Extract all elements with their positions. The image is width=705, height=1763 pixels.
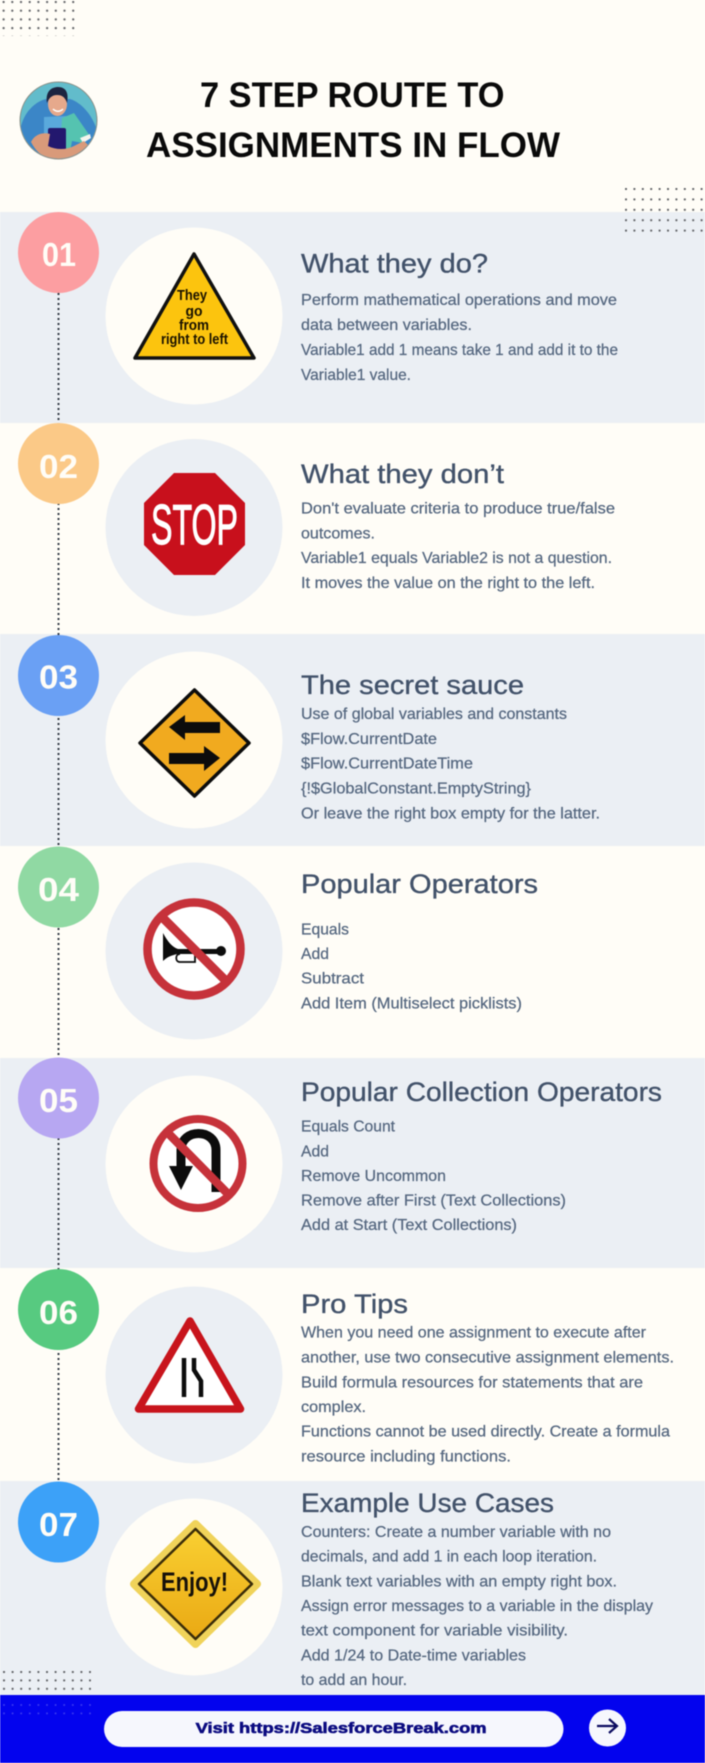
text block: what they do: data between variables. [301,317,472,334]
text block: example use cases: Blank text variables with an empty right box. [301,1574,617,1590]
badge 03: 03 [39,658,78,696]
text block: popular operators: Subtract [301,970,365,988]
text block: the secret sauce: {!$GlobalConstant.EmptyString} [301,780,532,798]
panel: step 5 popular collection operators [0,1058,705,1268]
text block: what they don't: Don't evaluate criteria to produce true/false [301,500,615,518]
panel: step 6 pro tips [0,1268,705,1481]
text block: pro tips: complex. [301,1399,366,1416]
text block: pro tips [301,1324,674,1466]
timeline dotted connector [58,293,60,1482]
icon: warning triangle right to left: They [177,287,208,304]
icon: no horn sign [148,902,240,996]
footer link pill [104,1711,564,1747]
footer bar [0,1695,705,1763]
text block: what they do: Variable1 value. [301,367,411,384]
text block: the secret sauce: Use of global variables and constants [301,706,567,723]
text block: what they don't [301,500,615,592]
title: 7 STEP ROUTE TO [200,76,504,115]
footer link pill: Visit https://SalesforceBreak.com [196,1720,487,1737]
badge 02 [18,423,99,504]
icon: warning triangle right to left [135,254,254,358]
text block: pro tips: When you need one assignment to execute after [301,1324,647,1342]
icon: enjoy diamond sign [134,1524,257,1644]
badge 07: 07 [39,1506,78,1543]
text block: popular operators: Equals [301,922,349,938]
text block: example use cases: Assign error messages to a variable in the display [301,1598,653,1615]
badge 07 [18,1482,99,1562]
text block: popular operators: Add Item (Multiselect picklists) [301,996,522,1012]
text block: what they do [301,292,618,384]
title: ASSIGNMENTS IN FLOW [146,126,560,165]
text block: popular collection operators: Remove Uncommon [301,1168,446,1185]
text block: the secret sauce: Or leave the right box empty for the latter. [301,806,600,822]
panel: step 7 example use cases [0,1481,705,1695]
panel: step 1 what they do [0,212,705,423]
text block: what they do: Variable1 add 1 means take 1 and add it to the [301,342,618,359]
text block: pro tips: Functions cannot be used directly. Create a formula [301,1424,670,1440]
text block: popular collection operators: Equals Count [301,1118,396,1136]
text block: example use cases [301,1524,653,1689]
text block: example use cases: text component for variable visibility. [301,1622,568,1640]
badge 04: 04 [38,871,80,908]
text block: pro tips: Build formula resources for statements that are [301,1374,643,1392]
badge 05 [18,1058,99,1138]
icon: warning triangle right to left: from [179,317,209,334]
text block: popular collection operators: Remove after First (Text Collections) [301,1192,566,1210]
icon: two-way traffic diamond sign [140,690,249,796]
text block: example use cases: to add an hour. [301,1672,407,1689]
badge 05: 05 [39,1082,78,1119]
heading: what they do: What they do? [301,248,488,278]
badge 03 [18,635,99,716]
text block: popular collection operators: Add [301,1144,329,1160]
text block: example use cases: Counters: Create a number variable with no [301,1524,611,1541]
icon: stop sign: STOP [151,493,238,557]
icon: stop sign [144,473,245,575]
avatar portrait [20,82,97,160]
badge 01 [18,212,99,293]
badge 06 [18,1269,99,1350]
panel: step 2 what they don't [0,423,705,634]
panel: step 4 popular operators [0,846,705,1058]
text block: what they don't: outcomes. [301,526,375,542]
text block: popular operators [301,922,522,1012]
text block: popular operators: Add [301,946,329,963]
heading: example use cases: Example Use Cases [301,1488,554,1518]
panel: step 3 the secret sauce [0,634,705,846]
icon: no u-turn sign [154,1119,242,1208]
badge 04 [18,846,99,928]
heading: pro tips: Pro Tips [301,1289,408,1319]
text block: the secret sauce: $Flow.CurrentDate [301,731,437,748]
text block: what they do: Perform mathematical operations and move [301,292,617,309]
text block: example use cases: Add 1/24 to Date-time variables [301,1648,526,1664]
icon: warning triangle right to left: go [186,303,202,320]
text block: popular collection operators [301,1118,566,1234]
heading: what they don't: What they don’t [301,459,505,489]
icon: road narrows triangle sign [138,1321,240,1409]
badge 02: 02 [39,448,78,485]
title [146,76,560,165]
heading: popular collection operators: Popular Collection Operators [301,1077,662,1107]
text block: the secret sauce: $Flow.CurrentDateTime [301,756,473,772]
heading: popular operators: Popular Operators [301,869,538,899]
text block: pro tips: resource including functions. [301,1448,511,1466]
icon: warning triangle right to left: right to left [161,331,228,348]
text block: example use cases: decimals, and add 1 in each loop iteration. [301,1548,597,1566]
text block: the secret sauce [301,706,600,822]
text block: pro tips: another, use two consecutive assignment elements. [301,1350,674,1366]
text block: what they don't: Variable1 equals Variable2 is not a question. [301,550,612,567]
icon: enjoy diamond sign: Enjoy! [161,1567,228,1597]
badge 01: 01 [42,236,76,273]
text block: what they don't: It moves the value on the right to the left. [301,575,595,592]
icon: arrow button [589,1710,626,1746]
timeline number badges [18,212,99,1562]
badge 06: 06 [39,1294,78,1331]
heading: the secret sauce: The secret sauce [301,670,524,700]
text block: popular collection operators: Add at Start (Text Collections) [301,1217,517,1234]
